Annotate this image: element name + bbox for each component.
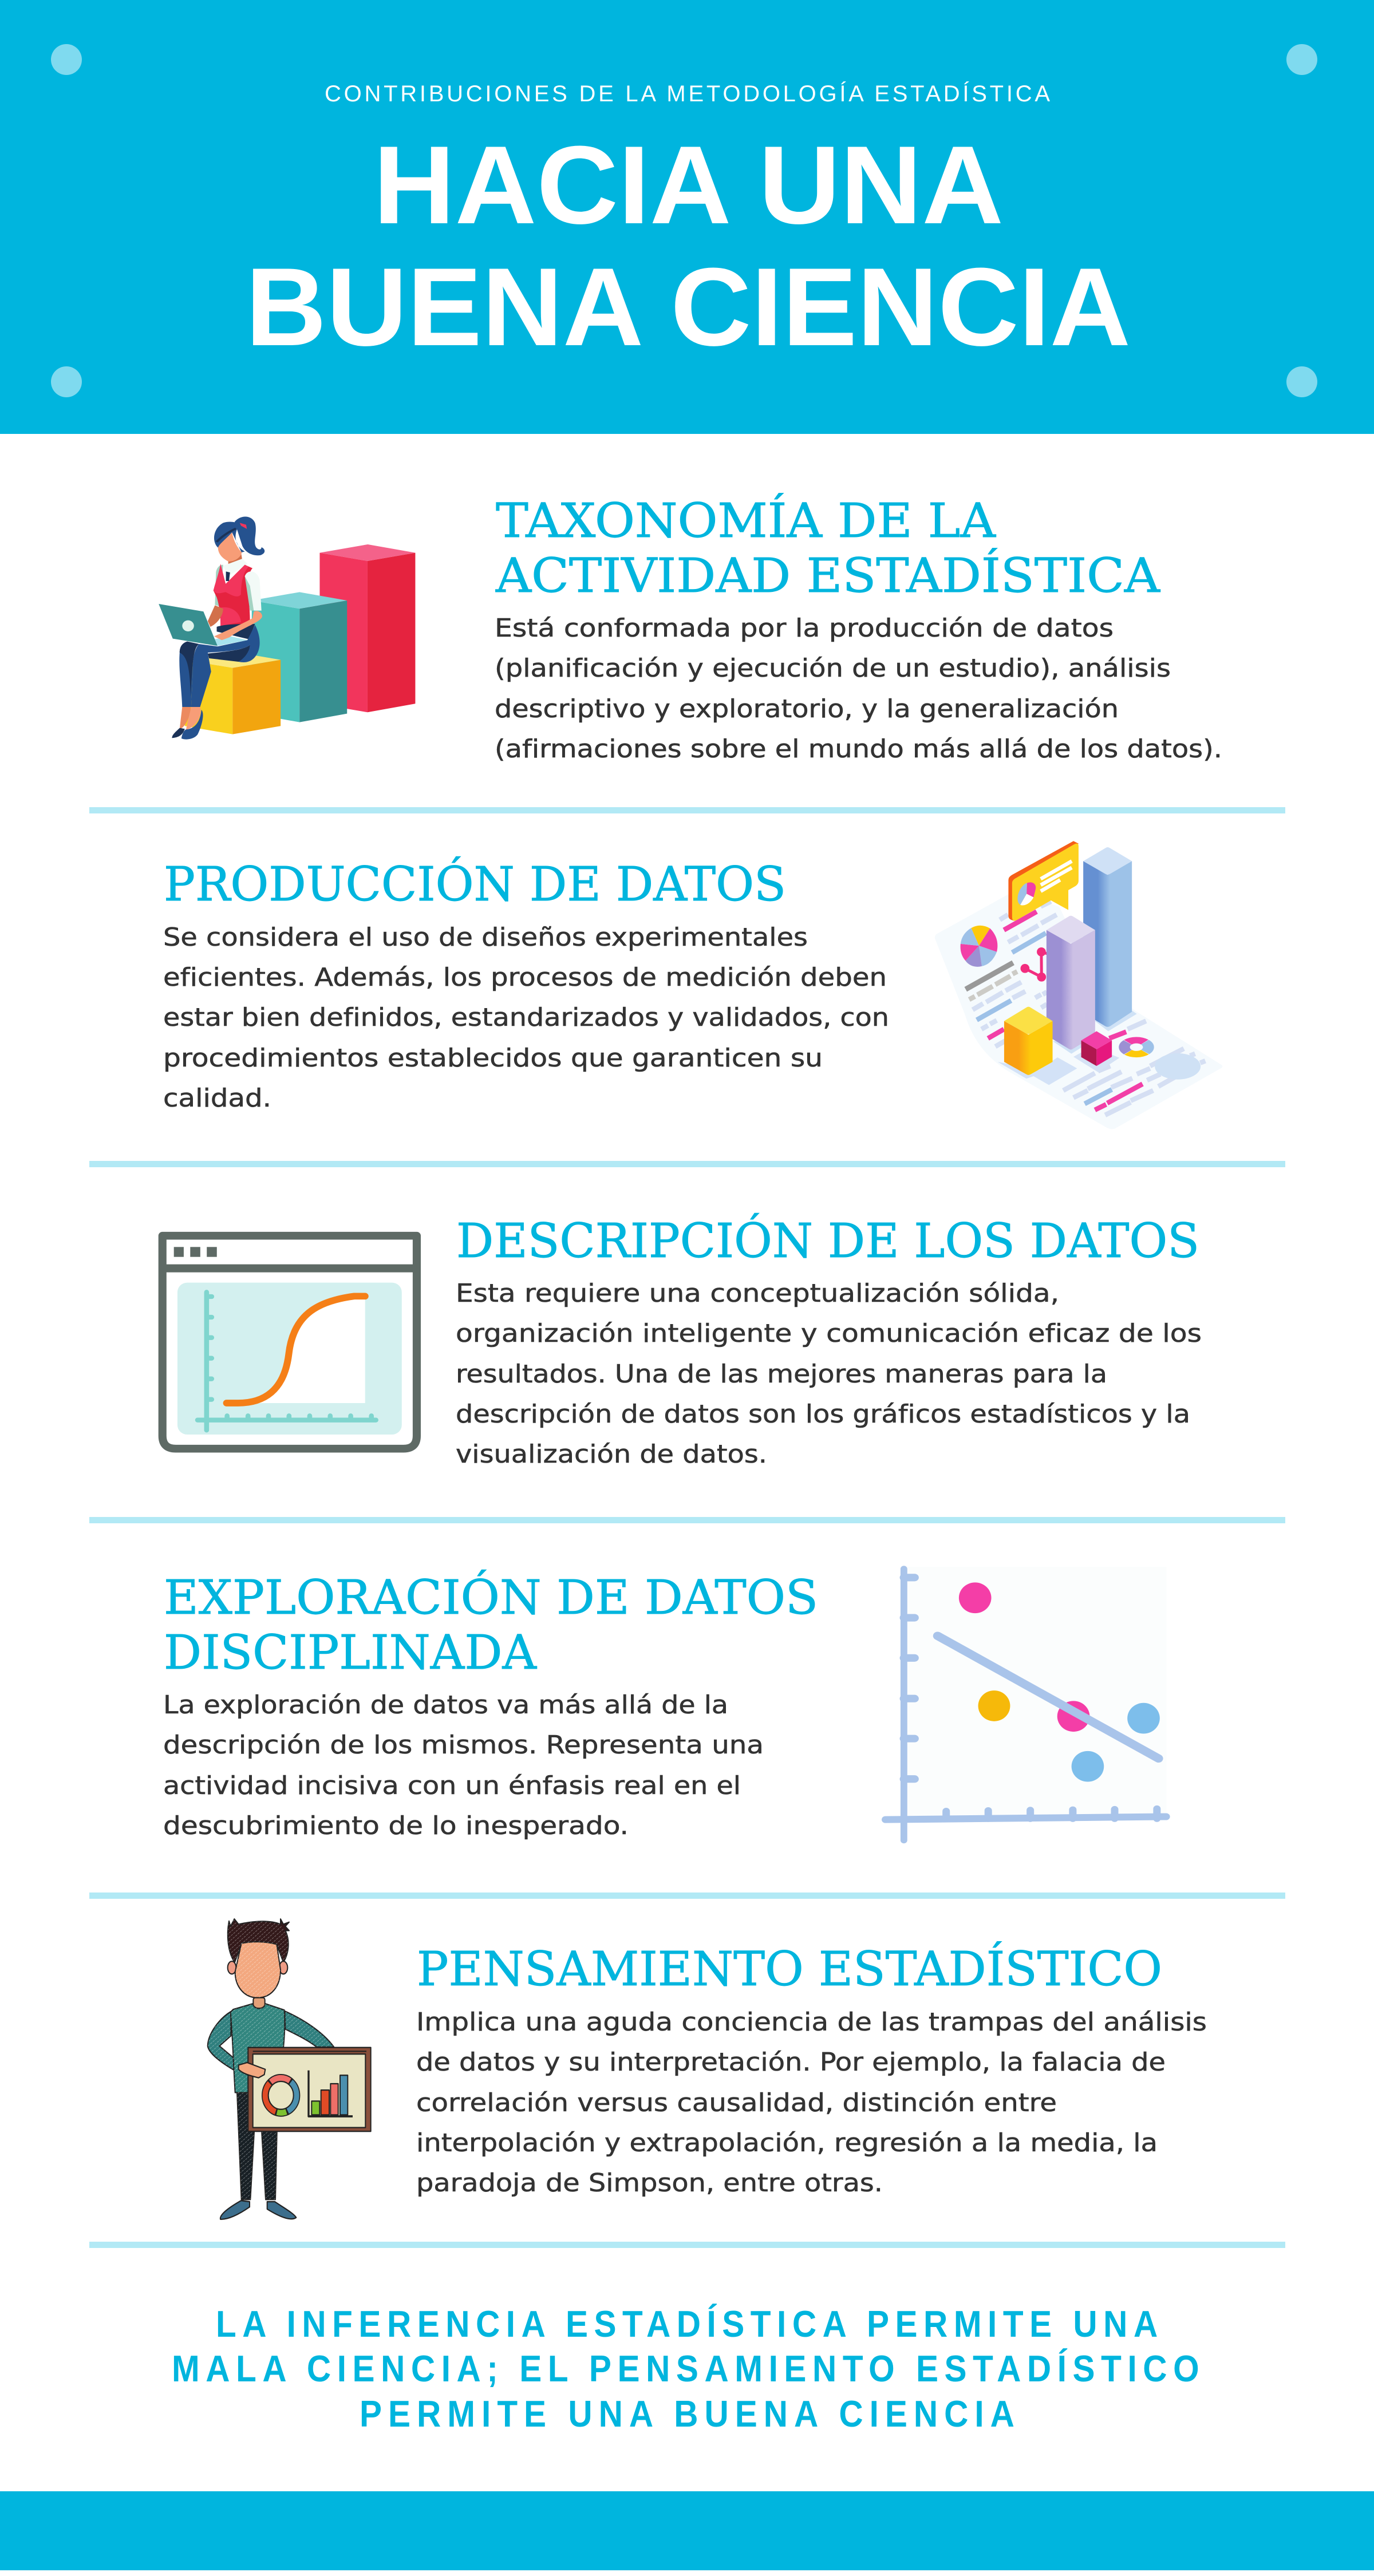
- icon: isometric charts on report: [935, 841, 1222, 1129]
- closing statement: LA INFERENCIA ESTADÍSTICA PERMITE UNA: [216, 2304, 1158, 2345]
- icon: woman with laptop on bar chart: [159, 516, 415, 740]
- text block: [456, 1279, 1202, 1469]
- decorative dots: [51, 44, 1317, 397]
- heading: DISCIPLINADA: [164, 1626, 538, 1680]
- text block: (afirmaciones sobre el mundo más allá de los datos).: [495, 734, 1222, 764]
- panel: descripción de los datos: [163, 1212, 1202, 1469]
- text block: estar bien definidos, estandarizados y validados, con: [163, 1003, 889, 1032]
- purple bar: [1047, 916, 1095, 1050]
- heading: EXPLORACIÓN DE DATOS: [164, 1569, 818, 1625]
- text block: Esta requiere una conceptualización sólida,: [456, 1279, 1059, 1308]
- text block: La exploración de datos va más allá de la: [163, 1690, 728, 1720]
- text block: calidad.: [163, 1084, 271, 1113]
- text block: paradoja de Simpson, entre otras.: [416, 2168, 883, 2198]
- pink cube: [1081, 1031, 1112, 1066]
- text block: de datos y su interpretación. Por ejemplo, la falacia de: [416, 2048, 1166, 2077]
- text block: interpolación y extrapolación, regresión a la media, la: [416, 2128, 1158, 2158]
- closing statement: [172, 2304, 1199, 2435]
- text block: [495, 614, 1222, 764]
- title: [246, 123, 1131, 369]
- heading: DESCRIPCIÓN DE LOS DATOS: [456, 1212, 1199, 1269]
- text block: [416, 2008, 1207, 2198]
- text block: descripción de datos son los gráficos estadísticos y la: [456, 1400, 1190, 1429]
- heading: PENSAMIENTO ESTADÍSTICO: [417, 1941, 1162, 1997]
- footer bar: [0, 2491, 1374, 2570]
- text block: descubrimiento de lo inesperado.: [163, 1811, 629, 1840]
- icon: scatter plot with trend line: [886, 1567, 1167, 1840]
- title: BUENA CIENCIA: [246, 245, 1131, 369]
- text block: resultados. Una de las mejores maneras para la: [456, 1360, 1107, 1389]
- text block: actividad incisiva con un énfasis real en el: [163, 1771, 741, 1800]
- panel: taxonomía: [159, 493, 1222, 764]
- text block: organización inteligente y comunicación eficaz de los: [456, 1319, 1202, 1348]
- panel: exploración de datos: [163, 1567, 1167, 1840]
- text block: correlación versus causalidad, distinción entre: [416, 2088, 1057, 2117]
- text block: [163, 1690, 764, 1840]
- subtitle: CONTRIBUCIONES DE LA METODOLOGÍA ESTADÍSTICA: [325, 81, 1050, 106]
- donut chart: [1119, 1037, 1154, 1057]
- closing statement: PERMITE UNA BUENA CIENCIA: [360, 2393, 1014, 2435]
- text block: Está conformada por la producción de datos: [495, 614, 1114, 643]
- pie chart: [961, 926, 997, 967]
- heading: PRODUCCIÓN DE DATOS: [164, 856, 786, 912]
- text block: (planificación y ejecución de un estudio), análisis: [495, 654, 1171, 683]
- text block: Implica una aguda conciencia de las trampas del análisis: [416, 2008, 1207, 2037]
- heading: ACTIVIDAD ESTADÍSTICA: [495, 548, 1161, 603]
- text block: [163, 923, 889, 1113]
- panel: pensamiento estadístico: [208, 1919, 1207, 2219]
- text block: eficientes. Además, los procesos de medición deben: [163, 963, 887, 992]
- closing statement: MALA CIENCIA; EL PENSAMIENTO ESTADÍSTICO: [172, 2348, 1199, 2390]
- heading: [495, 493, 1161, 603]
- tall blue bar: [1083, 847, 1132, 1027]
- icon: man presenting board: [208, 1919, 371, 2219]
- text block: visualización de datos.: [456, 1440, 767, 1469]
- text block: procedimientos establecidos que garanticen su: [163, 1044, 823, 1073]
- heading: TAXONOMÍA DE LA: [496, 493, 997, 548]
- text block: descripción de los mismos. Representa una: [163, 1730, 764, 1760]
- heading: [164, 1569, 818, 1680]
- yellow bar: [1004, 1007, 1053, 1075]
- text block: descriptivo y exploratorio, y la generalización: [495, 694, 1119, 724]
- title: HACIA UNA: [373, 123, 1004, 247]
- panel: producción de datos: [163, 841, 1222, 1129]
- header banner: [0, 0, 1374, 434]
- icon: browser window with s-curve: [163, 1236, 417, 1449]
- speech bubble: [1008, 841, 1079, 921]
- network glyph: [1020, 947, 1047, 982]
- text block: Se considera el uso de diseños experimentales: [163, 923, 808, 952]
